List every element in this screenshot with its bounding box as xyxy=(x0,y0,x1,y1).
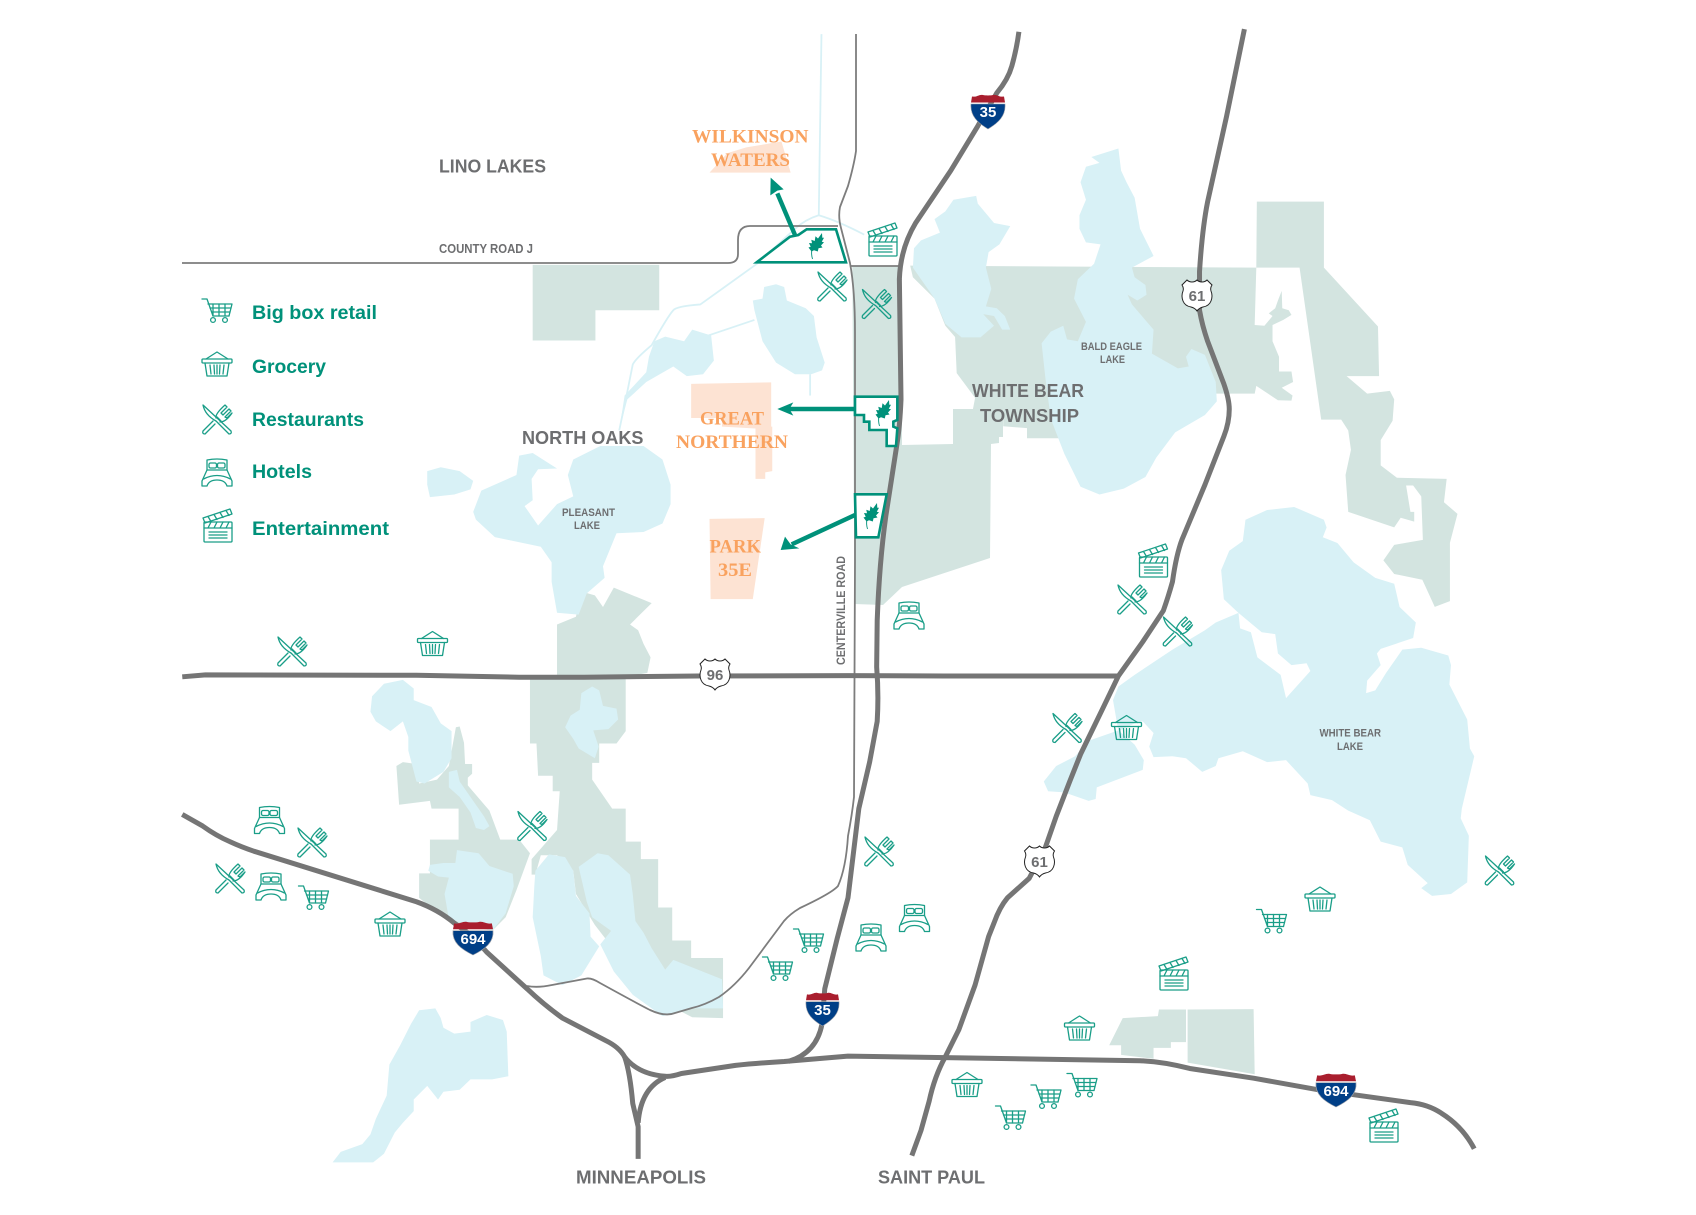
stream: lake outlet xyxy=(809,374,811,396)
road: strip top edge xyxy=(850,265,900,267)
legend label: Big box retail: Big box retail xyxy=(252,303,377,324)
green area: White Bear Township xyxy=(910,202,1457,607)
highway shields xyxy=(453,95,1356,1107)
legend label: Restaurants: Restaurants xyxy=(252,410,364,431)
shield: US 96: 96 xyxy=(707,667,723,684)
site: Wilkinson Waters outline xyxy=(757,229,846,262)
lake: White Bear Lake xyxy=(1113,507,1474,896)
legend label: Grocery: Grocery xyxy=(252,357,326,378)
shield: US 96 xyxy=(700,659,730,690)
road: Centerville Road xyxy=(527,34,856,1014)
shield: US 61 north xyxy=(1182,280,1212,311)
legend xyxy=(202,299,390,542)
label: Great Northern: NORTHERN xyxy=(676,432,788,453)
shield: Interstate 35 north xyxy=(971,95,1005,129)
site: Great Northern outline xyxy=(855,397,897,446)
shield: Interstate 694 west xyxy=(453,922,493,955)
shield: US 61 north: 61 xyxy=(1189,288,1205,305)
label: White Bear Township: TOWNSHIP xyxy=(980,405,1079,426)
lake: small west of it xyxy=(619,330,714,430)
green area: south-east left block xyxy=(1109,1010,1186,1059)
lake: small west of Pleasant Lake xyxy=(427,467,473,497)
label: White Bear Township xyxy=(972,380,1084,426)
label: Bald Eagle Lake: BALD EAGLE xyxy=(1081,341,1142,353)
streams xyxy=(619,34,864,430)
map icons: big box retail xyxy=(298,886,1286,1129)
shield: Interstate 694 west: 694 xyxy=(460,931,486,948)
stream: north channel xyxy=(819,34,821,215)
lake: far south-west xyxy=(333,1008,508,1162)
label: County Road J: COUNTY ROAD J xyxy=(439,242,533,256)
lake: near the 694 shield xyxy=(428,850,514,931)
label: Bald Eagle Lake: LAKE xyxy=(1100,354,1125,366)
label: Park 35E: 35E xyxy=(718,560,752,581)
label: White Bear Lake xyxy=(1320,728,1381,753)
parcel: Great Northern xyxy=(691,382,772,479)
label: Pleasant Lake: PLEASANT xyxy=(562,507,615,519)
road: County Road J xyxy=(182,226,838,263)
highways xyxy=(182,29,1474,1159)
lake: south corridor right xyxy=(579,853,723,1016)
map icons: restaurants xyxy=(216,272,1514,893)
legend label: Entertainment: Entertainment xyxy=(252,519,390,540)
lake: Bald Eagle Lake xyxy=(1042,149,1217,494)
icon: legend big box retail xyxy=(202,299,232,322)
label: Saint Paul: SAINT PAUL xyxy=(878,1166,985,1188)
label: Great Northern: GREAT xyxy=(700,408,764,430)
lake: Pleasant Lake xyxy=(473,446,671,615)
shield: Interstate 694 east: 694 xyxy=(1323,1083,1349,1100)
icon: oak leaf Great Northern xyxy=(876,400,891,426)
label: Park 35E xyxy=(710,536,761,581)
label: Bald Eagle Lake xyxy=(1081,341,1142,366)
road: Interstate 35 xyxy=(789,32,1019,1061)
lake: south corridor left xyxy=(533,854,599,985)
shield: US 61 south: 61 xyxy=(1031,854,1048,871)
lake: thin narrow lake xyxy=(449,770,489,830)
lake: inside central corridor xyxy=(565,686,618,758)
stream: main channel xyxy=(619,215,864,430)
lake: north of Great Northern xyxy=(753,284,825,374)
map labels xyxy=(439,126,1381,1188)
green area: central corridor xyxy=(530,588,723,1018)
label: Pleasant Lake xyxy=(562,507,615,532)
stream: lake connector xyxy=(708,320,754,335)
label: Great Northern xyxy=(676,408,788,453)
label: Park 35E: PARK xyxy=(710,536,761,558)
arrow: to Great Northern xyxy=(777,402,855,416)
lake: south of Highway 96 west xyxy=(370,680,452,783)
shield: US 61 south xyxy=(1024,846,1054,877)
icon: legend grocery xyxy=(202,352,232,376)
label: Pleasant Lake: LAKE xyxy=(574,520,600,532)
label: Minneapolis: MINNEAPOLIS xyxy=(576,1166,706,1188)
map icons: entertainment xyxy=(868,223,1398,1142)
label: White Bear Township: WHITE BEAR xyxy=(972,380,1084,401)
map icons: hotels xyxy=(254,602,930,951)
road: spur to Minneapolis xyxy=(625,1057,638,1159)
label: Centerville Road: CENTERVILLE ROAD xyxy=(836,556,848,665)
legend label: Hotels: Hotels xyxy=(252,462,312,483)
label: Wilkinson Waters xyxy=(692,126,809,171)
icon: oak leaf Wilkinson Waters xyxy=(808,233,824,259)
thin roads xyxy=(182,34,900,1014)
icon: legend restaurants xyxy=(203,405,232,434)
lake: Goose Lake lobe xyxy=(1044,730,1144,801)
road: ramp to Interstate 694 xyxy=(638,1077,665,1123)
road: Highway 61 xyxy=(912,29,1244,1156)
shield: Interstate 694 east xyxy=(1316,1074,1356,1107)
shield: Interstate 35 south: 35 xyxy=(814,1002,831,1019)
green area: west of central corridor xyxy=(396,726,530,931)
parcel: Park 35E xyxy=(710,518,765,599)
lakes xyxy=(333,149,1474,1162)
label: Lino Lakes: LINO LAKES xyxy=(439,156,546,176)
orange development parcels xyxy=(691,142,791,599)
shield: Interstate 35 north: 35 xyxy=(980,104,996,121)
development site outlines and arrows xyxy=(757,178,897,550)
icon: legend entertainment xyxy=(203,509,232,542)
parcel: Wilkinson Waters xyxy=(710,142,791,173)
label: North Oaks: NORTH OAKS xyxy=(522,427,644,448)
label: Wilkinson Waters: WILKINSON xyxy=(692,126,809,148)
icon: legend hotels xyxy=(202,459,232,486)
arrow: to Wilkinson Waters xyxy=(770,178,795,235)
arrow: to Park 35E xyxy=(781,515,855,550)
map icons: grocery xyxy=(375,632,1335,1096)
icon: oak leaf Park 35E xyxy=(864,503,879,529)
road: Highway 96 xyxy=(182,675,1118,677)
green block: north of North Oaks xyxy=(533,265,659,340)
label: Wilkinson Waters: WATERS xyxy=(711,150,790,171)
lake: north-west of Bald Eagle xyxy=(913,196,1010,337)
road: Interstate 694 xyxy=(182,814,1474,1149)
site: Park 35E outline xyxy=(855,494,887,537)
green areas: conservation and township land xyxy=(396,202,1457,1074)
label: White Bear Lake: WHITE BEAR xyxy=(1320,728,1381,740)
label: White Bear Lake: LAKE xyxy=(1337,741,1363,753)
green strip: along Centerville Road xyxy=(852,266,1003,605)
shield: Interstate 35 south xyxy=(806,993,839,1026)
green area: south-east right block xyxy=(1188,1009,1255,1074)
